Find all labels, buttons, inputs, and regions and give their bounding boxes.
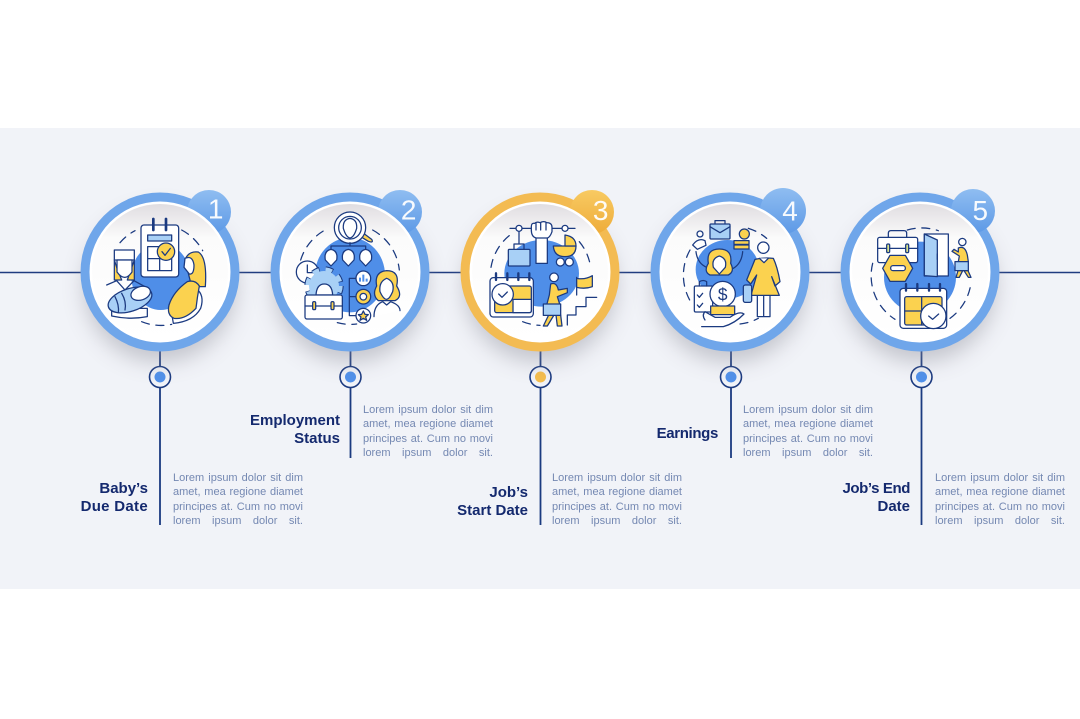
text block 1: Lorem ipsum dolor sit dim xyxy=(173,472,303,484)
text block 3: principes at. Cum no movi xyxy=(552,501,682,513)
heading: Baby's Due Date: Baby’s xyxy=(99,480,148,497)
heading: Job's End Date xyxy=(842,480,910,515)
number badge 2: 2 xyxy=(401,194,416,225)
connector 1 xyxy=(150,345,170,525)
heading: Baby's Due Date xyxy=(81,480,148,515)
number badge 5: 5 xyxy=(973,195,988,226)
text block 5: lorem ipsum dolor sit. xyxy=(935,515,1065,527)
step 1: baby's due date xyxy=(80,190,240,525)
connector 3 xyxy=(530,345,551,525)
text block 5 xyxy=(935,472,1065,527)
text block 1: amet, mea regione diamet xyxy=(173,486,303,498)
number badge 4: 4 xyxy=(782,196,798,227)
heading: Job's End Date: Job’s End xyxy=(842,480,910,497)
circle frame 3 xyxy=(460,190,620,362)
circle frame 5 xyxy=(840,189,1000,362)
text block 4: Lorem ipsum dolor sit dim xyxy=(743,404,873,416)
heading: Job's End Date: Date xyxy=(877,498,910,515)
heading: Job's Start Date: Job’s xyxy=(489,484,528,501)
circle frame 1 xyxy=(80,190,240,362)
text block 1: lorem ipsum dolor sit. xyxy=(173,515,303,527)
step 4: earnings xyxy=(650,188,810,458)
icon: calendar, nurse, baby and pregnant woman xyxy=(105,219,206,325)
heading: Job's Start Date xyxy=(457,484,528,519)
heading: Employment Status: Employment xyxy=(250,412,340,429)
step 2: employment status xyxy=(270,190,430,458)
text block 3 xyxy=(552,472,682,527)
heading: Baby's Due Date: Due Date xyxy=(81,498,148,515)
icon: briefcase, stop sign, door, leaving person and calendar xyxy=(871,228,971,329)
circle frame 2 xyxy=(270,190,430,362)
text block 3: amet, mea regione diamet xyxy=(552,486,682,498)
icon: woman, coins, briefcase and money in hand xyxy=(683,221,780,327)
text block 4: principes at. Cum no movi xyxy=(743,433,873,445)
text block 1 xyxy=(173,472,303,527)
text block 5: Lorem ipsum dolor sit dim xyxy=(935,472,1065,484)
connector 5 xyxy=(911,345,932,525)
text block 4: lorem ipsum dolor sit. xyxy=(743,447,873,459)
text block 2 xyxy=(363,404,493,459)
text block 4 xyxy=(743,404,873,459)
text block 3: lorem ipsum dolor sit. xyxy=(552,515,682,527)
step 3: job's start date xyxy=(460,190,620,525)
heading: Earnings: Earnings xyxy=(657,425,718,442)
background panel xyxy=(0,128,1080,589)
icon: fist, bag, stroller, calendar, walking person and stairs xyxy=(490,222,597,326)
heading: Employment Status: Status xyxy=(294,430,340,447)
text block 2: amet, mea regione diamet xyxy=(363,418,493,430)
text block 2: principes at. Cum no movi xyxy=(363,433,493,445)
text block 5: amet, mea regione diamet xyxy=(935,486,1065,498)
icon: organisation chart, gear and briefcase xyxy=(296,212,400,324)
connector 4 xyxy=(720,345,742,458)
text block 2: Lorem ipsum dolor sit dim xyxy=(363,404,493,416)
icon: woman, coins, briefcase and money in hand: $ xyxy=(718,284,728,304)
circle frame 4 xyxy=(650,188,810,362)
step 5: job's end date xyxy=(840,189,1000,525)
number badge 3: 3 xyxy=(593,195,608,226)
text block 1: principes at. Cum no movi xyxy=(173,501,303,513)
heading: Employment Status xyxy=(250,412,340,447)
text block 5: principes at. Cum no movi xyxy=(935,501,1065,513)
heading: Job's Start Date: Start Date xyxy=(457,502,528,519)
number badge 1: 1 xyxy=(208,194,223,225)
text block 4: amet, mea regione diamet xyxy=(743,418,873,430)
connector 2 xyxy=(340,345,361,458)
horizontal timeline xyxy=(0,272,1080,274)
text block 3: Lorem ipsum dolor sit dim xyxy=(552,472,682,484)
text block 2: lorem ipsum dolor sit. xyxy=(363,447,493,459)
